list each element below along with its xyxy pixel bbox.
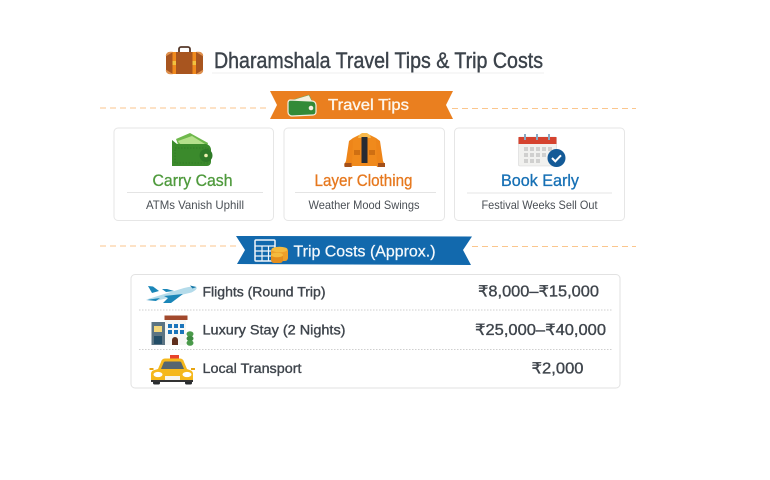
icon: hotel (152, 316, 194, 346)
panel: layer clothing (284, 128, 444, 220)
icon: airplane (145, 286, 197, 303)
text: layer clothing note: Weather Mood Swings (308, 198, 420, 212)
panel: book early (454, 128, 624, 220)
value: flights: ₹8,000–₹15,000 (478, 284, 599, 300)
heading: layer clothing: Layer Clothing (314, 172, 412, 190)
icon: calendar (518, 134, 566, 167)
icon: taxi (150, 355, 195, 384)
icon: suitcase (166, 47, 203, 74)
heading: book early: Book Early (501, 172, 580, 190)
row: flights (145, 284, 599, 303)
icon: green wallet (172, 133, 212, 166)
title: Dharamshala Travel Tips & Trip Costs (214, 48, 543, 73)
label: flights: Flights (Round Trip) (202, 284, 326, 300)
value: local transport: ₹2,000 (532, 360, 584, 378)
row: luxury stay (152, 316, 606, 346)
label: local transport: Local Transport (202, 361, 302, 376)
panel: carry cash (114, 128, 274, 220)
text: book early note: Festival Weeks Sell Out (482, 198, 598, 212)
icon: jacket (344, 133, 385, 167)
text: carry cash note: ATMs Vanish Uphill (146, 198, 244, 212)
icon: calculator and coins (255, 240, 288, 263)
value: luxury stay: ₹25,000–₹40,000 (475, 322, 606, 339)
banner label: Trip Costs (Approx.) (294, 244, 436, 260)
row: local transport (150, 355, 584, 384)
panel: trip costs table (131, 274, 620, 388)
banner: travel tips (270, 91, 453, 119)
banner: trip costs (236, 236, 472, 265)
banner label: Travel Tips (328, 97, 409, 114)
heading: carry cash: Carry Cash (152, 172, 232, 190)
label: luxury stay: Luxury Stay (2 Nights) (202, 322, 346, 338)
icon: small wallet (288, 95, 316, 116)
